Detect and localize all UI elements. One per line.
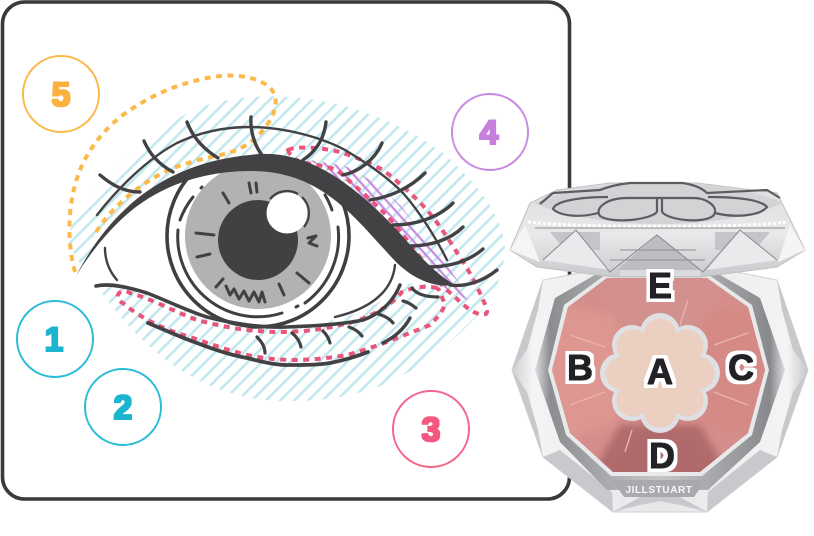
eyeshadow compact [510,183,808,512]
flower centre rim [600,313,720,433]
number 3 badge [393,391,469,467]
inner dark rim [535,272,785,490]
lid [510,183,805,277]
iris disc [185,163,331,309]
number 4 badge: 4 [480,114,499,152]
inner ring [178,187,339,317]
label D: D [649,435,675,476]
dashed zone 3: red lower lid band [118,287,445,360]
shade E [599,278,719,286]
catchlight outline [270,191,309,227]
upper lashes [100,117,497,285]
label C: C [728,347,754,388]
shade letter labels [567,265,754,476]
shade B [552,306,614,435]
number 1 badge: 1 [45,321,63,359]
label E: E [648,265,672,306]
label B: B [567,347,593,388]
lower lid lines [96,248,438,365]
number 2 badge [85,369,161,445]
lid flower outline [540,183,780,220]
brand plate [612,480,706,497]
eyeshadow pan [552,278,765,472]
number 5 badge [23,56,99,132]
inner light rim [548,275,769,476]
number 4 badge [452,94,528,170]
hatched zone 4: purple outer corner [310,160,473,303]
pupil [218,200,298,280]
number 1 badge [17,301,93,377]
label A: A [647,351,673,392]
hatched zone: eye surround [67,96,505,401]
flower centre shade A [606,318,714,428]
shade C [742,304,765,438]
catchlight [266,192,308,234]
number 3 badge: 3 [422,411,440,449]
dashed zone 3: red upper outer loop [288,148,487,314]
panel: eye diagram [2,2,570,499]
lid body [510,183,805,277]
number 5 badge: 5 [52,76,70,114]
lid facets [510,222,805,276]
brand name: JILLSTUART [625,485,693,496]
lid top flower [534,183,783,224]
petal divider lines [570,300,748,452]
iris ticks [196,183,317,302]
case facets [512,280,808,512]
eye white [76,159,445,327]
crease line [97,127,447,260]
upper lash line [76,154,455,286]
dashed zone 5: orange brow area [69,76,276,272]
outer ring [165,180,351,329]
case body [512,265,808,512]
shade D [598,422,720,472]
number 2 badge: 2 [114,389,132,427]
iris [165,171,351,329]
